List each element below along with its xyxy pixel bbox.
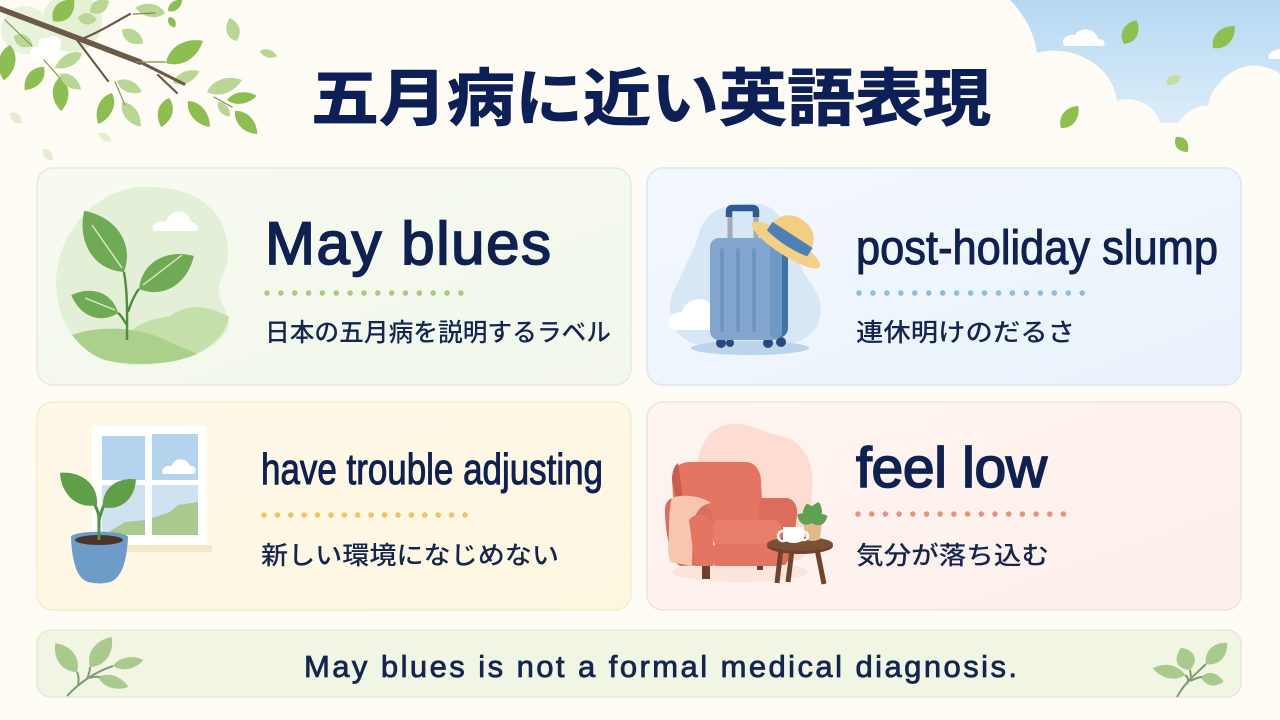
description: 新しい環境になじめない	[261, 542, 559, 570]
description: 日本の五月病を説明するラベル	[265, 319, 611, 347]
icon: sprout with hills	[56, 187, 229, 365]
dotted divider	[267, 290, 461, 296]
description: 気分が落ち込む	[856, 542, 1049, 570]
dotted divider	[859, 290, 1083, 296]
icon: right sprig	[1151, 637, 1233, 697]
dotted divider	[264, 512, 465, 518]
icon: suitcase and straw hat	[668, 198, 836, 355]
heading: feel low: feel low	[856, 436, 1048, 500]
panel: feel low	[647, 402, 1241, 610]
heading: have trouble adjusting: have trouble adjusting	[261, 445, 603, 494]
footer text: May blues is not a formal medical diagnosis.	[304, 649, 1017, 684]
heading: post-holiday slump: post-holiday slump	[856, 222, 1218, 275]
branch with leaves, top left	[0, 0, 278, 163]
panel: have trouble adjusting	[37, 402, 631, 610]
heading: May blues: May blues	[265, 210, 551, 277]
panel: footer note	[37, 630, 1241, 697]
panel: post-holiday slump	[647, 168, 1241, 385]
panel: May blues	[37, 168, 631, 385]
dotted divider	[858, 511, 1064, 517]
title: 五月病に近い英語表現	[311, 65, 991, 134]
floating leaves, top right	[1055, 17, 1240, 156]
icon: armchair with side table	[665, 424, 833, 584]
description: 連休明けのだるさ	[856, 319, 1075, 347]
icon: left sprig	[48, 632, 145, 696]
icon: potted plant by window	[52, 426, 212, 584]
sky with clouds, top right	[1010, 0, 1280, 123]
